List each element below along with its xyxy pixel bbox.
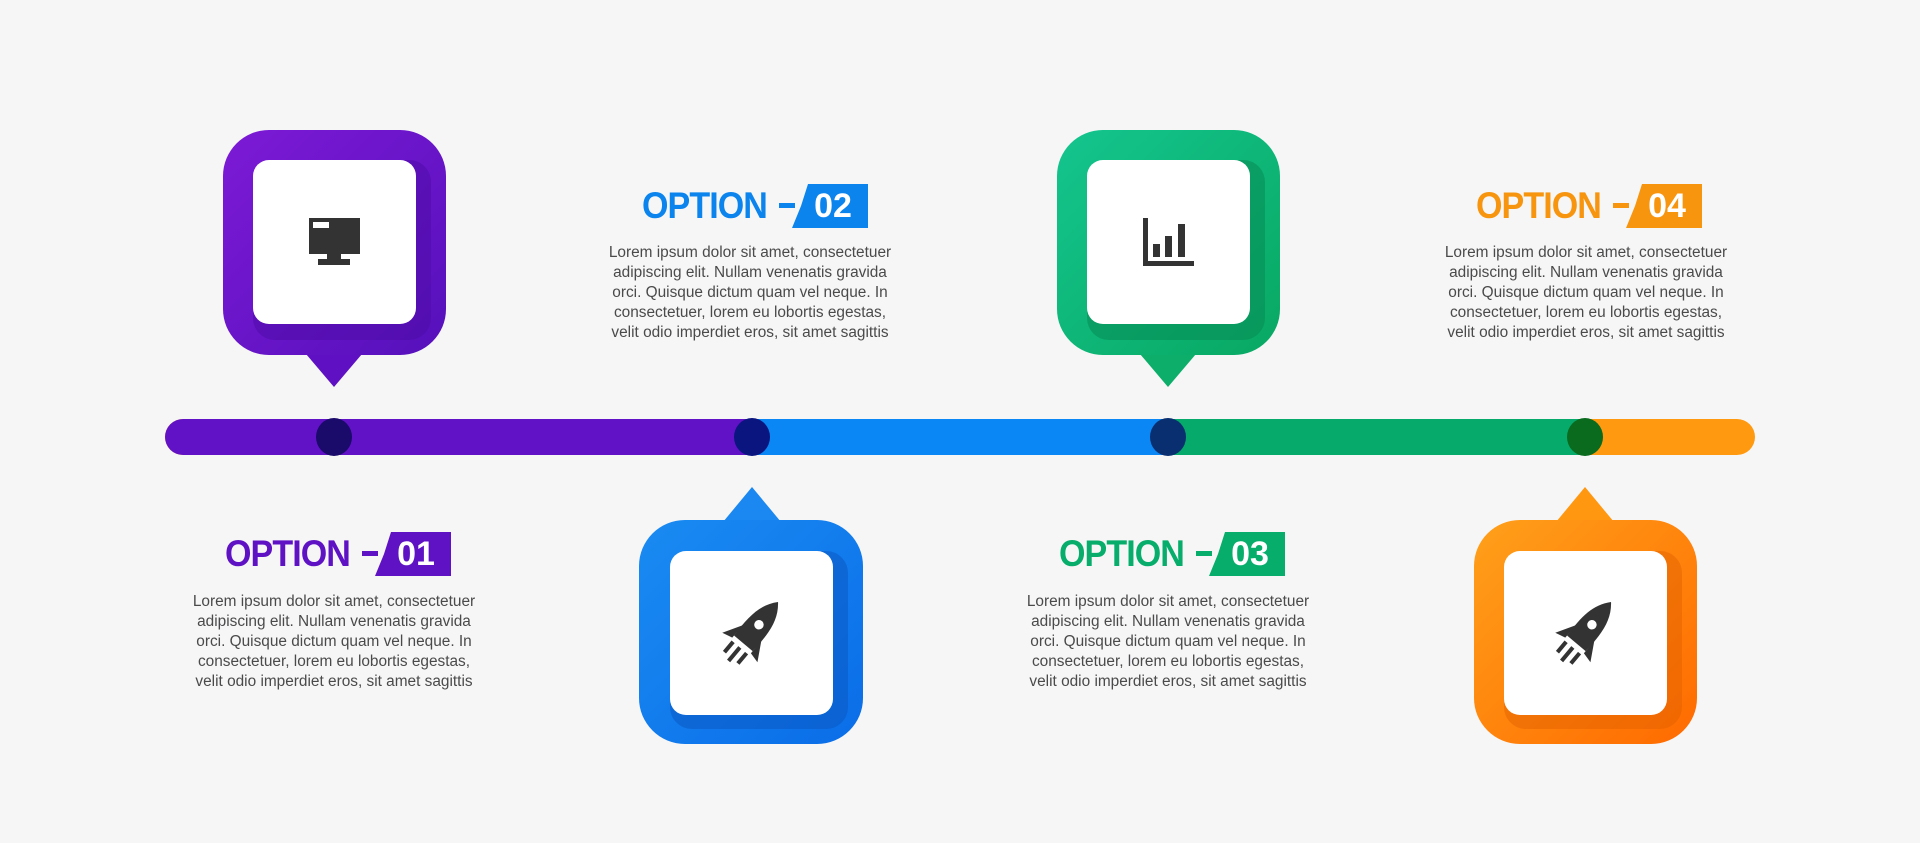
- text: option 02: Lorem ipsum dolor sit amet, consectetuer: [609, 244, 891, 261]
- timeline bar: [165, 418, 1755, 456]
- heading: option 03: 03: [1231, 535, 1269, 573]
- text: option 01: orci. Quisque dictum quam vel neque. In: [196, 633, 472, 650]
- heading: option 04: OPTION: [1476, 185, 1601, 226]
- text: option 02: consectetuer, lorem eu lobortis egestas,: [614, 304, 886, 321]
- box 3 green chart: [1057, 130, 1280, 387]
- text: option 04: Lorem ipsum dolor sit amet, consectetuer: [1445, 244, 1727, 261]
- text: option 03: orci. Quisque dictum quam vel neque. In: [1030, 633, 1306, 650]
- text: option 03: consectetuer, lorem eu lobortis egestas,: [1032, 653, 1304, 670]
- heading: option 03: OPTION: [1059, 533, 1184, 574]
- heading: option 03: [1059, 532, 1285, 576]
- text: option 04: velit odio imperdiet eros, sit amet sagittis: [1447, 324, 1725, 341]
- heading: option 01: 01: [397, 535, 435, 573]
- text: option 03: adipiscing elit. Nullam venenatis gravida: [1031, 613, 1305, 630]
- icon: rocket: [711, 587, 796, 676]
- text: option 01: [193, 593, 475, 690]
- box 1 purple monitor: [223, 130, 446, 387]
- icon: monitor: [309, 218, 360, 265]
- heading: option 01: [225, 532, 451, 576]
- text: option 01: adipiscing elit. Nullam venenatis gravida: [197, 613, 471, 630]
- text: option 03: velit odio imperdiet eros, sit amet sagittis: [1029, 673, 1307, 690]
- text: option 02: [609, 244, 891, 341]
- text: option 04: [1445, 244, 1727, 341]
- text: option 02: orci. Quisque dictum quam vel neque. In: [612, 284, 888, 301]
- heading: option 04: 04: [1648, 187, 1686, 225]
- box 2 blue rocket: [639, 487, 863, 744]
- text: option 04: orci. Quisque dictum quam vel neque. In: [1448, 284, 1724, 301]
- text: option 04: adipiscing elit. Nullam venenatis gravida: [1449, 264, 1723, 281]
- text: option 03: Lorem ipsum dolor sit amet, consectetuer: [1027, 593, 1309, 610]
- text: option 01: consectetuer, lorem eu lobortis egestas,: [198, 653, 470, 670]
- text: option 02: adipiscing elit. Nullam venenatis gravida: [613, 264, 887, 281]
- heading: option 01: OPTION: [225, 533, 350, 574]
- text: option 01: velit odio imperdiet eros, sit amet sagittis: [195, 673, 473, 690]
- heading: option 02: OPTION: [642, 185, 767, 226]
- heading: option 02: 02: [814, 187, 852, 225]
- heading: option 02: [642, 184, 868, 228]
- icon: bar chart: [1143, 218, 1194, 266]
- icon: rocket: [1544, 587, 1629, 676]
- box 4 orange rocket: [1474, 487, 1697, 744]
- text: option 01: Lorem ipsum dolor sit amet, consectetuer: [193, 593, 475, 610]
- text: option 03: [1027, 593, 1309, 690]
- text: option 02: velit odio imperdiet eros, sit amet sagittis: [611, 324, 889, 341]
- text: option 04: consectetuer, lorem eu lobortis egestas,: [1450, 304, 1722, 321]
- heading: option 04: [1476, 184, 1702, 228]
